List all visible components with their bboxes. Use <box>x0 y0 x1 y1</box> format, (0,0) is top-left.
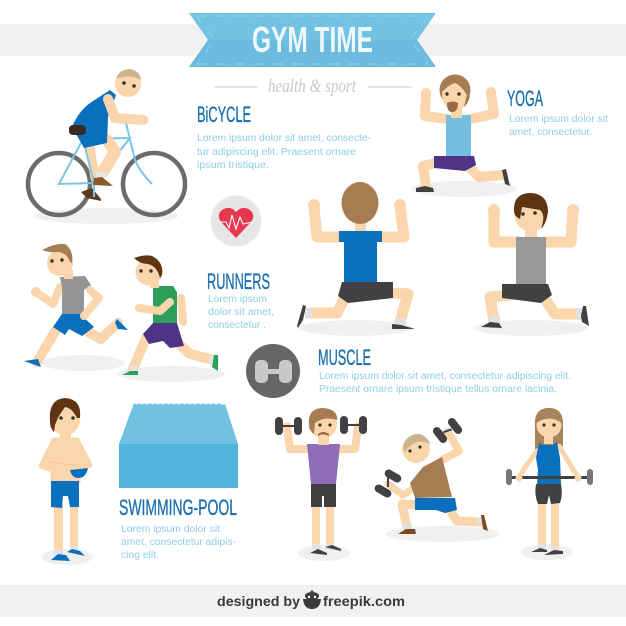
text: bicycle: Lorem ipsum dolor sit amet, consecte- <box>197 132 371 144</box>
figure: swimmer <box>41 398 93 565</box>
figure: yoga man <box>411 74 517 197</box>
heading: swimming pool: SWIMMING-POOL <box>119 495 237 520</box>
text: muscle: Lorem ipsum dolor sit amet, consectetur adipiscing elit. <box>319 370 571 382</box>
subtitle: health & sport: health & sport <box>268 76 357 97</box>
icon: swimming pool <box>119 403 238 488</box>
text: bicycle: ipsum tristique. <box>197 159 269 171</box>
heading: yoga: YOGA <box>507 86 543 111</box>
heading: bicycle: BiCYCLE <box>197 102 251 127</box>
figure: man in grey tank top <box>474 193 589 336</box>
text: swimming pool: amet, consectetur adipis- <box>121 536 236 548</box>
text: swimming pool: Lorem ipsum dolor sit <box>121 523 220 535</box>
text: swimming pool: cing elit. <box>121 549 159 561</box>
text: runners: consectetur . <box>208 319 266 331</box>
credit: designed by freepik.com: freepik.com <box>323 593 405 609</box>
figure: runner in grey shirt <box>24 244 128 371</box>
text: yoga: amet, consectetur. <box>509 126 592 138</box>
text: runners: Lorem ipsum <box>208 293 267 305</box>
text: swimming pool <box>121 523 236 561</box>
text: yoga: Lorem ipsum dolor sit <box>509 113 608 125</box>
title: GYM TIME <box>252 19 373 60</box>
text: runners <box>208 293 274 331</box>
heading: muscle: MUSCLE <box>318 345 371 370</box>
top grey band <box>0 24 626 56</box>
credit: designed by freepik.com <box>217 590 405 609</box>
figure: runner in green shirt <box>117 255 225 382</box>
credit: designed by freepik.com: designed by <box>217 593 300 609</box>
text: muscle <box>319 370 571 395</box>
icon: dumbbell <box>246 344 300 398</box>
figure: cyclist <box>28 69 185 224</box>
text: bicycle <box>197 132 371 171</box>
figure: man lunging with dumbbells <box>373 416 500 542</box>
heading: runners: RUNNERS <box>207 269 270 294</box>
text: bicycle: tur adipiscing elit. Praesent ornare <box>197 146 356 158</box>
title ribbon <box>189 13 436 67</box>
figure: man with dumbbells <box>275 408 367 561</box>
text: yoga <box>509 113 608 138</box>
figure: man from behind <box>297 182 415 336</box>
text: muscle: Praesent ornare ipsum tristique tellus ornare lacinia. <box>319 383 557 395</box>
icon: freepik logo <box>303 590 321 609</box>
icon: heart rate <box>210 196 262 246</box>
text: runners: dolor sit amet, <box>208 306 274 318</box>
figure: woman with barbell <box>506 408 593 560</box>
bottom grey band <box>0 585 626 617</box>
